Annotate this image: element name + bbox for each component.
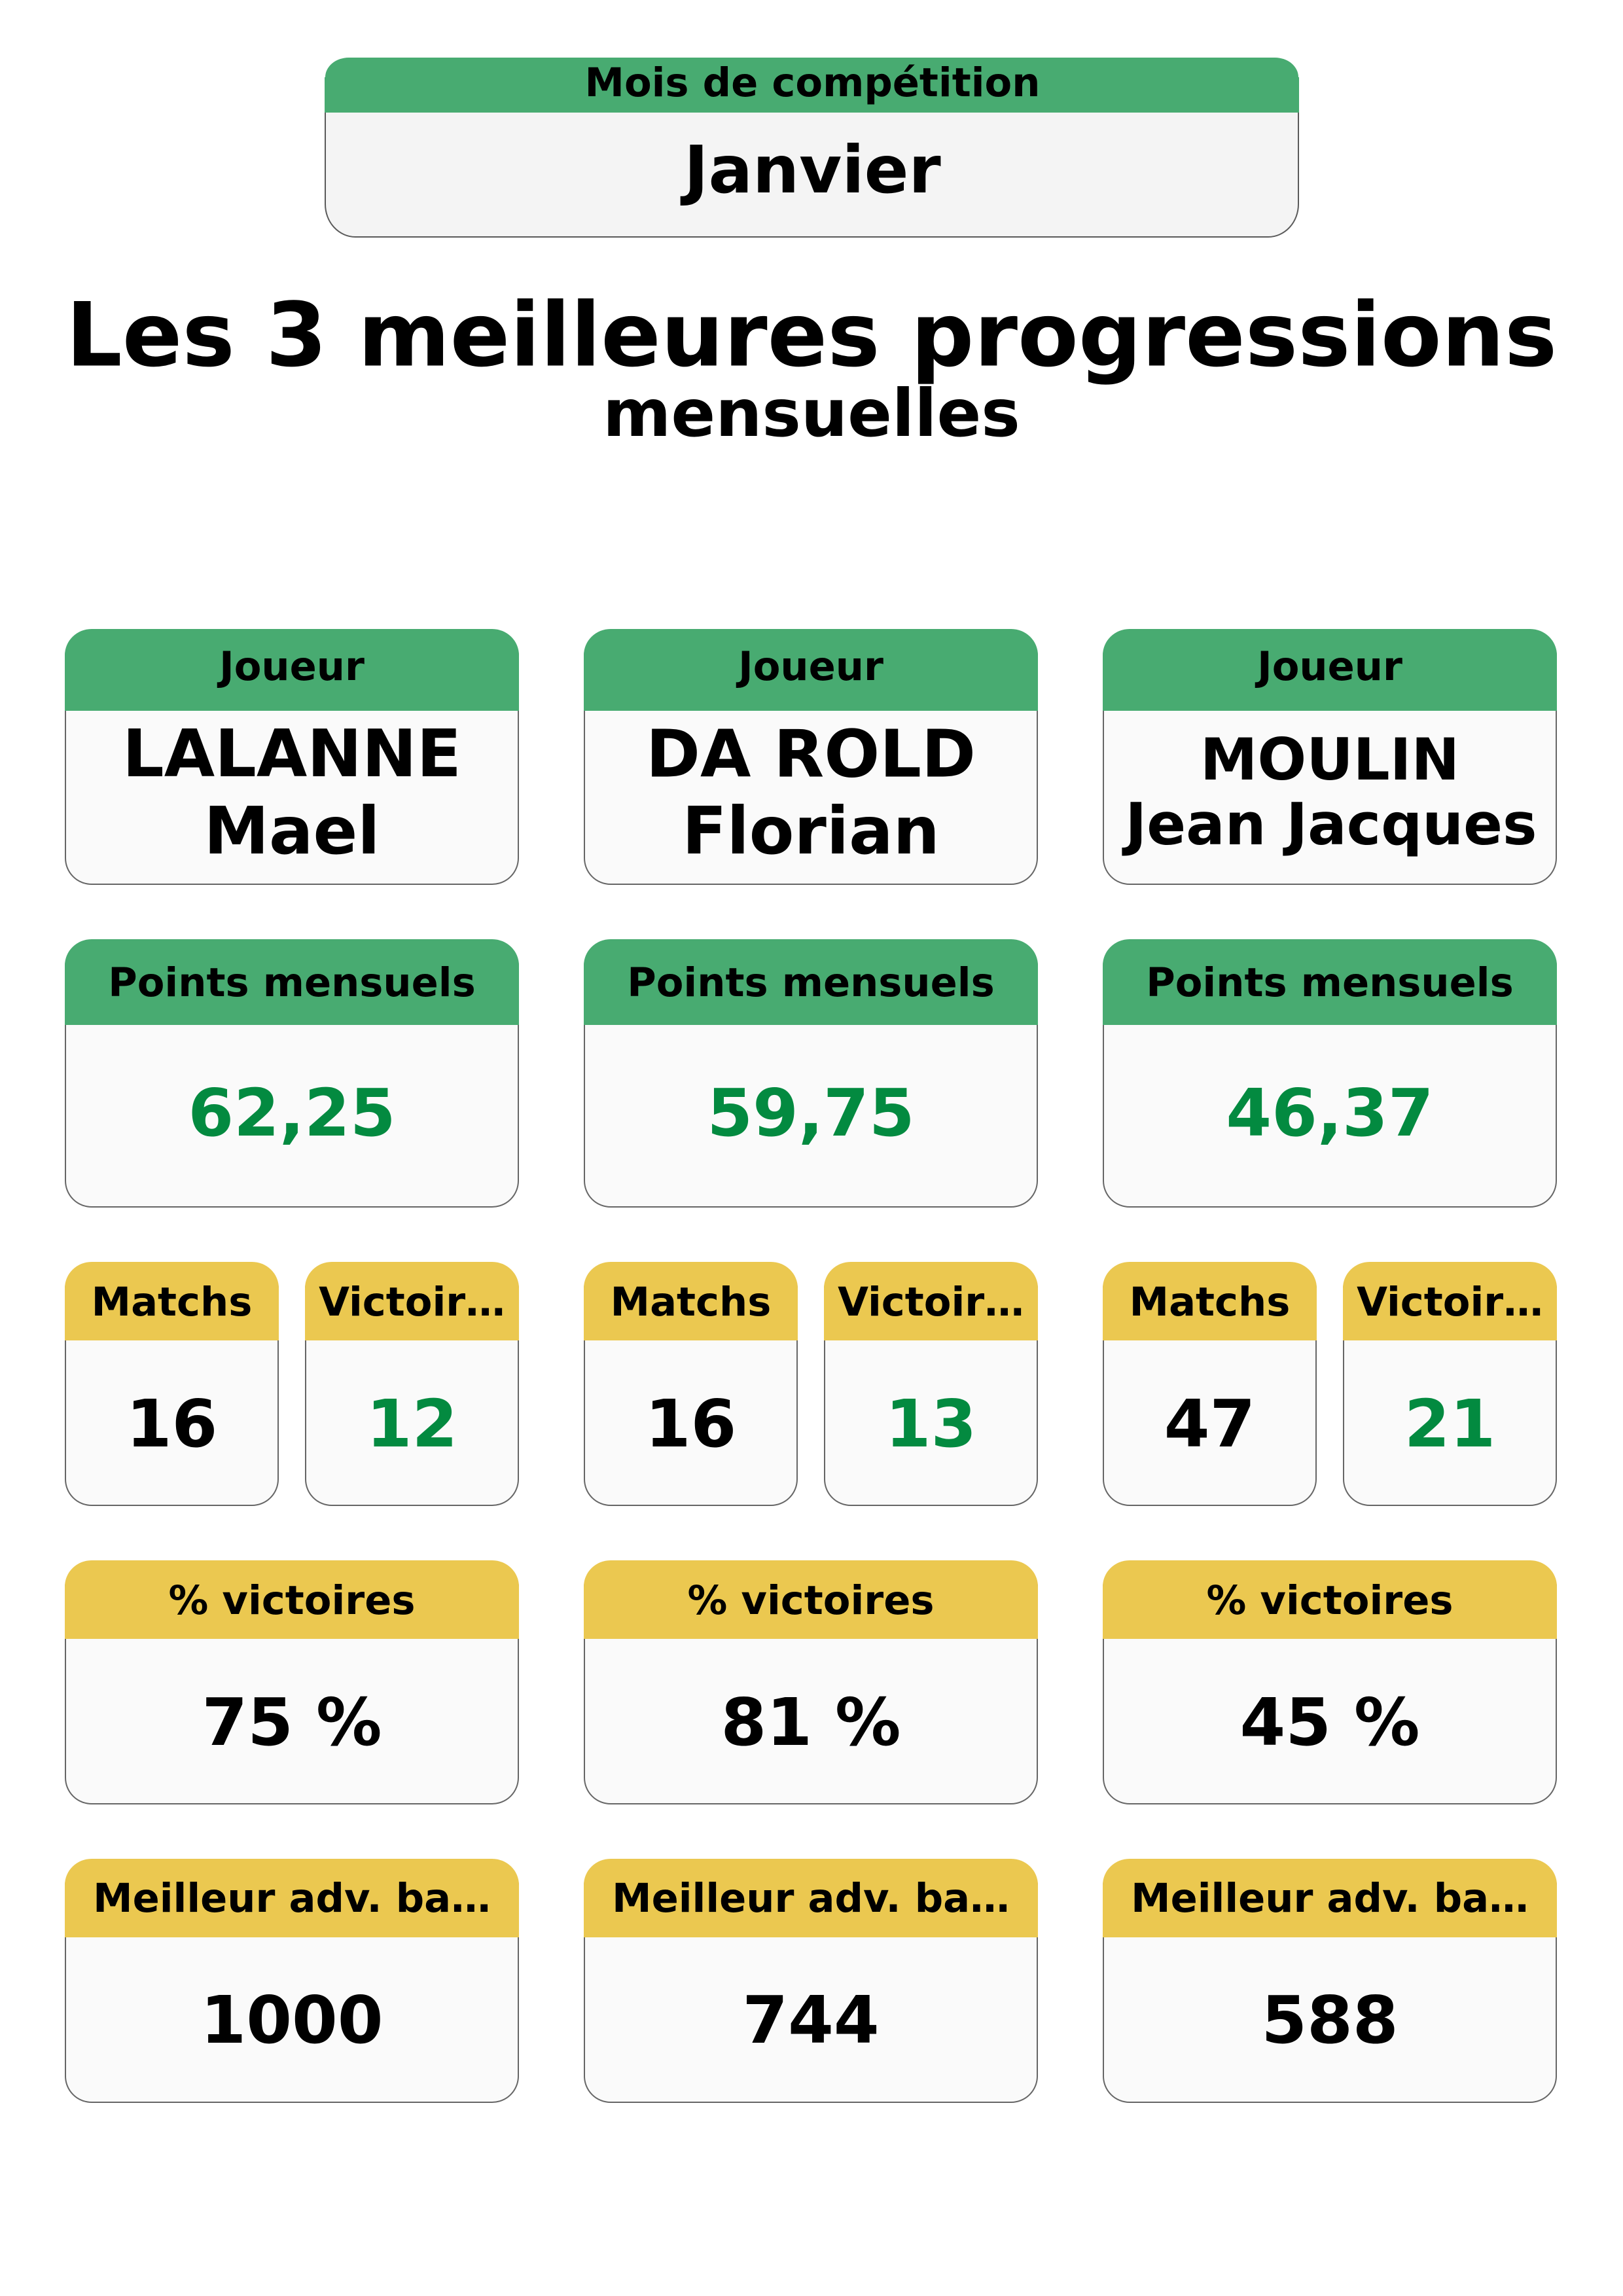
panel: player 2 wins: Victoir…: [838, 1280, 1024, 1325]
panel: month of competition: [325, 58, 1299, 237]
panel: player 3 name: [1103, 629, 1557, 884]
panel: player 2 name: Joueur: [736, 644, 883, 690]
panel: player 2 win percentage: % victoires: [687, 1578, 935, 1624]
panel: player 1 best opponent beaten: 1000: [200, 1982, 383, 2058]
panel: player 3 matches: Matchs: [1130, 1280, 1290, 1325]
panel: player 2 name: [584, 629, 1038, 884]
panel: player 3 monthly points: [1103, 939, 1557, 1207]
panel: player 1 matches: Matchs: [92, 1280, 252, 1325]
panel: player 1 wins: 12: [366, 1386, 457, 1462]
panel: player 1 name: LALANNE: [122, 715, 461, 792]
panel: player 1 name: [65, 629, 519, 884]
panel: player 3 name: MOULIN: [1200, 726, 1459, 793]
panel: player 2 win percentage: [584, 1560, 1038, 1804]
panel: player 3 wins: [1343, 1262, 1557, 1505]
panel: player 2 matches: 16: [645, 1386, 736, 1462]
panel: player 2 name: Florian: [682, 793, 940, 869]
panel: player 3 best opponent beaten: [1103, 1859, 1557, 2102]
panel: player 1 matches: [65, 1262, 279, 1505]
panel: player 2 matches: Matchs: [611, 1280, 771, 1325]
panel: player 1 name: Mael: [204, 793, 380, 869]
panel: player 3 monthly points: Points mensuels: [1146, 960, 1514, 1006]
panel: player 2 monthly points: 59,75: [707, 1075, 915, 1151]
title: Les 3 meilleures progressions: [66, 284, 1557, 386]
panel: player 3 monthly points: 46,37: [1226, 1075, 1434, 1151]
panel: player 2 wins: 13: [885, 1386, 976, 1462]
title: mensuelles: [603, 375, 1020, 452]
panel: player 2 best opponent beaten: 744: [742, 1982, 880, 2058]
panel: player 2 name: DA ROLD: [646, 716, 976, 792]
panel: player 3 best opponent beaten: Meilleur adv. ba…: [1131, 1876, 1529, 1922]
panel: player 3 name: Jean Jacques: [1122, 791, 1537, 858]
panel: player 3 matches: 47: [1164, 1386, 1255, 1462]
panel: player 2 best opponent beaten: Meilleur adv. ba…: [612, 1876, 1010, 1922]
panel: player 1 monthly points: [65, 939, 519, 1207]
panel: player 2 best opponent beaten: [584, 1859, 1038, 2102]
panel: player 1 best opponent beaten: Meilleur adv. ba…: [93, 1876, 491, 1922]
panel: player 3 win percentage: % victoires: [1207, 1578, 1453, 1624]
panel: player 1 matches: 16: [126, 1386, 217, 1462]
panel: player 1 win percentage: % victoires: [169, 1578, 415, 1624]
panel: player 1 monthly points: 62,25: [188, 1075, 396, 1151]
panel: player 2 matches: [584, 1262, 798, 1505]
panel: player 1 win percentage: [65, 1560, 519, 1804]
panel: month of competition: Janvier: [680, 132, 941, 208]
panel: player 1 best opponent beaten: [65, 1859, 519, 2102]
panel: player 3 win percentage: [1103, 1560, 1557, 1804]
panel: player 3 wins: Victoir…: [1357, 1280, 1543, 1325]
title: [66, 284, 1557, 452]
panel: player 2 win percentage: 81 %: [721, 1684, 901, 1761]
panel: player 1 name: Joueur: [217, 644, 365, 690]
panel: player 1 monthly points: Points mensuels: [108, 960, 476, 1006]
panel: player 3 win percentage: 45 %: [1240, 1684, 1419, 1761]
panel: player 1 wins: [305, 1262, 519, 1505]
panel: player 1 win percentage: 75 %: [202, 1684, 382, 1761]
panel: player 3 wins: 21: [1404, 1386, 1495, 1462]
panel: player 1 wins: Victoir…: [319, 1280, 505, 1325]
panel: player 3 best opponent beaten: 588: [1261, 1982, 1399, 2058]
panel: player 2 wins: [824, 1262, 1038, 1505]
panel: player 2 monthly points: [584, 939, 1038, 1207]
panel: player 3 matches: [1103, 1262, 1317, 1505]
panel: month of competition: Mois de compétition: [585, 60, 1040, 106]
panel: player 3 name: Joueur: [1255, 644, 1402, 690]
panel: player 2 monthly points: Points mensuels: [627, 960, 995, 1006]
